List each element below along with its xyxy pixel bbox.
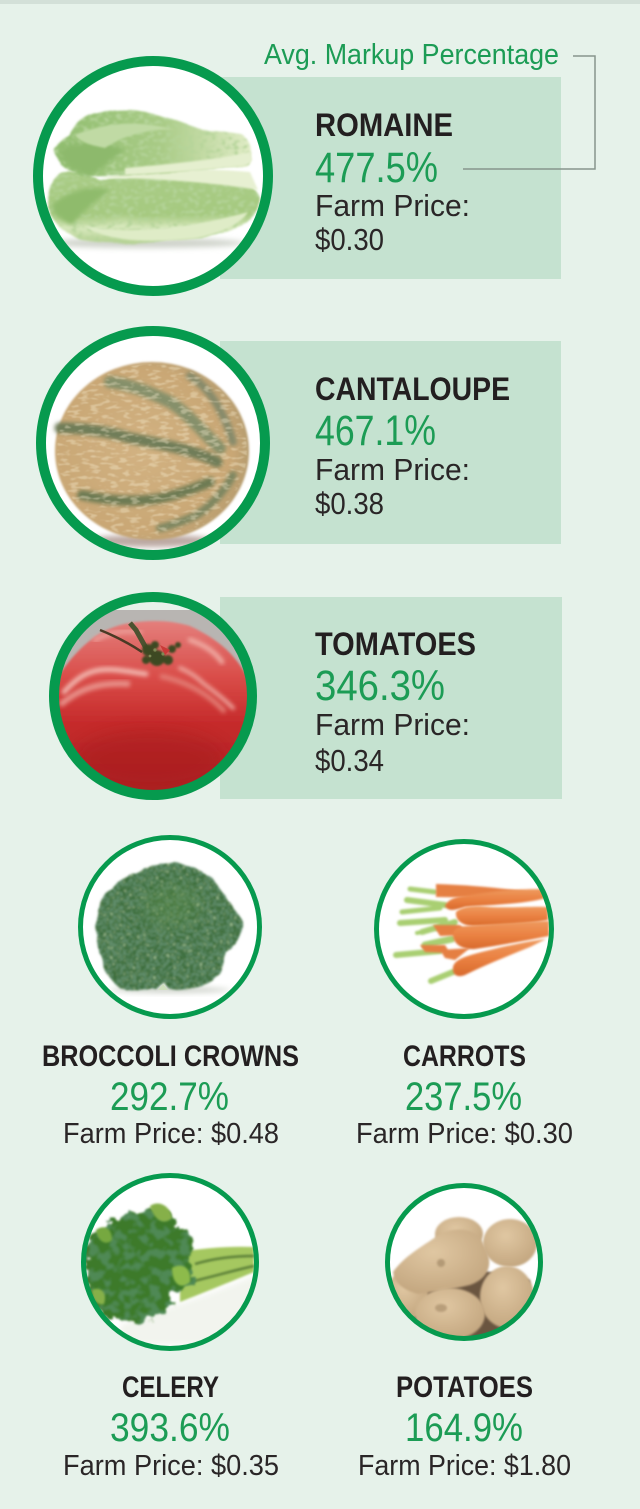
romaine text: 477.5%: [315, 144, 438, 192]
celery text: Farm Price: $0.35: [63, 1450, 279, 1482]
icon: tomato: [50, 597, 260, 800]
broccoli text: Farm Price: $0.48: [63, 1118, 279, 1150]
carrots text: [356, 1040, 573, 1150]
potatoes text: 164.9%: [405, 1406, 523, 1450]
broccoli text: 292.7%: [110, 1075, 229, 1119]
icon: broccoli: [80, 838, 260, 1016]
cantaloupe text: $0.38: [315, 486, 384, 521]
icon: romaine lettuce: [38, 61, 268, 291]
potatoes text: [358, 1371, 571, 1482]
cantaloupe text: CANTALOUPE: [315, 371, 510, 407]
cantaloupe text: [315, 371, 510, 521]
carrots text: CARROTS: [403, 1040, 526, 1073]
celery text: 393.6%: [110, 1406, 230, 1450]
icon: potatoes: [386, 1186, 540, 1345]
romaine text: [315, 107, 470, 257]
callout: avg markup percentage: Avg. Markup Percentage: [264, 39, 559, 71]
romaine text: $0.30: [315, 222, 384, 257]
cantaloupe text: 467.1%: [315, 407, 436, 455]
tomatoes text: Farm Price:: [315, 707, 470, 742]
tomatoes text: TOMATOES: [315, 626, 476, 662]
potatoes text: Farm Price: $1.80: [358, 1450, 571, 1482]
potatoes text: POTATOES: [396, 1371, 533, 1404]
item: potatoes: [358, 1186, 571, 1482]
tomatoes text: 346.3%: [315, 662, 445, 710]
panel: tomatoes: [50, 597, 562, 800]
carrots text: Farm Price: $0.30: [356, 1118, 573, 1150]
item: carrots: [356, 842, 573, 1150]
item: celery: [63, 1176, 279, 1482]
panel: romaine: [38, 61, 561, 291]
celery text: CELERY: [122, 1371, 219, 1404]
icon: celery: [84, 1176, 256, 1348]
broccoli text: [42, 1040, 299, 1150]
icon: carrots: [376, 842, 552, 1016]
romaine text: ROMAINE: [315, 107, 453, 143]
callout: avg markup percentage: [264, 39, 595, 169]
cantaloupe text: Farm Price:: [315, 452, 470, 487]
celery text: [63, 1371, 279, 1482]
panel: cantaloupe: [41, 331, 561, 555]
broccoli text: BROCCOLI CROWNS: [42, 1040, 299, 1073]
tomatoes text: [315, 626, 476, 778]
carrots text: 237.5%: [405, 1075, 522, 1119]
tomatoes text: $0.34: [315, 743, 384, 778]
romaine text: Farm Price:: [315, 188, 470, 223]
item: broccoli crowns: [42, 838, 299, 1150]
icon: cantaloupe: [41, 331, 265, 555]
